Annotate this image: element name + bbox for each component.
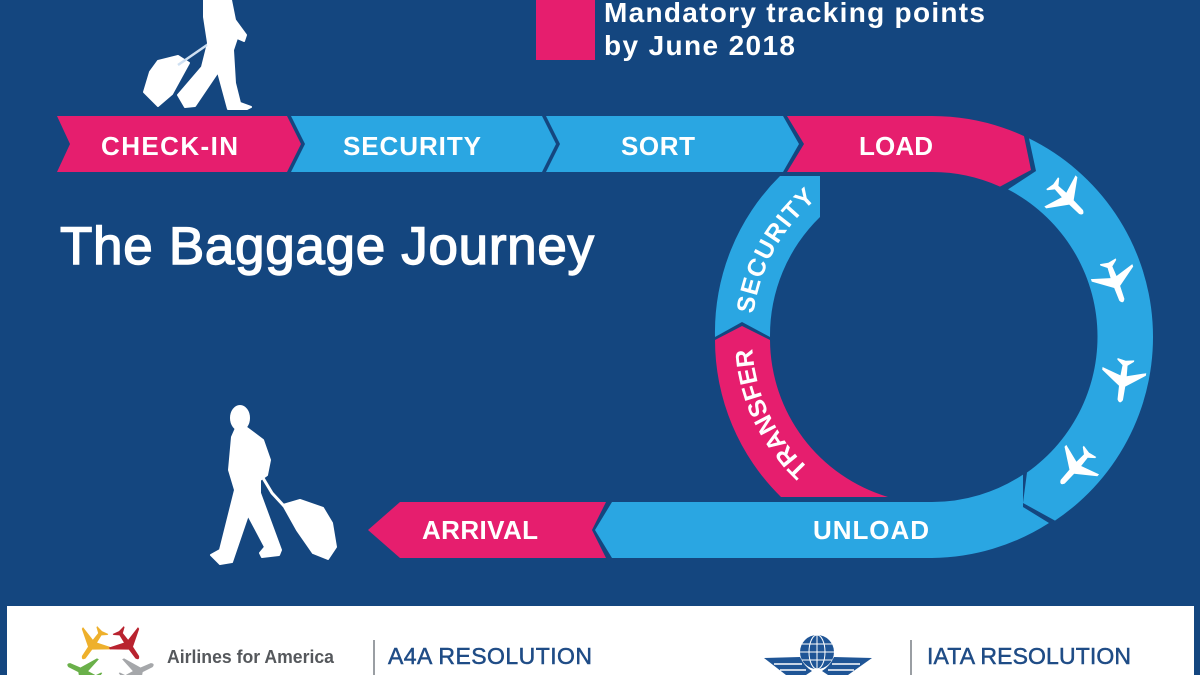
icon: plane 2 (1087, 254, 1143, 310)
step: transfer security: SECURITY (737, 186, 812, 312)
legend: mandatory tracking points (536, 0, 985, 61)
step: arrival (368, 502, 606, 558)
flight arc (1008, 138, 1153, 521)
step: transfer: TRANSFER (736, 349, 805, 481)
A4A divider (373, 640, 375, 675)
footer panel (7, 606, 1194, 675)
step: load (787, 116, 1031, 187)
step: sort (546, 116, 799, 172)
icon: traveller arriving with suitcase (211, 406, 336, 564)
step: unload (595, 475, 1049, 558)
step: transfer security (714, 176, 820, 337)
step: load: LOAD (859, 131, 933, 161)
heading: A4A resolution: A4A RESOLUTION (388, 643, 592, 669)
icon: plane 4 (1045, 437, 1106, 499)
step: unload: UNLOAD (813, 515, 929, 545)
icon: plane 3 (1098, 356, 1148, 405)
logo: Airlines for America (60, 620, 335, 675)
step: check-in: CHECK-IN (101, 131, 238, 161)
step: sort: SORT (621, 131, 695, 161)
icon: traveller departing with suitcase (144, 0, 251, 109)
step: check-in (57, 116, 301, 172)
logo: Airlines for America: Airlines for America (167, 647, 335, 667)
title: The Baggage Journey (60, 217, 594, 276)
IATA divider (910, 640, 912, 675)
heading: IATA resolution: IATA RESOLUTION (927, 643, 1131, 669)
logo: IATA (764, 635, 872, 675)
step: security (291, 116, 556, 172)
legend: mandatory tracking points: by June 2018 (604, 30, 795, 61)
step: arrival: ARRIVAL (422, 515, 538, 545)
icon: plane 1 (1037, 168, 1099, 230)
step: security: SECURITY (343, 131, 481, 161)
step: transfer (715, 326, 888, 497)
